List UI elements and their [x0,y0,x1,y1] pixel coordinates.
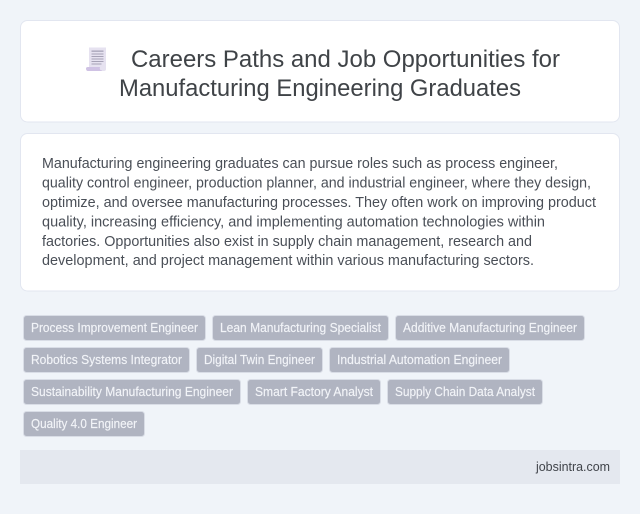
footer source text: jobsintra.com [535,460,610,474]
tag: Digital Twin Engineer [196,348,322,372]
description text: factories. Opportunities also exist in supply chain management, research and [42,234,532,250]
tag: Sustainability Manufacturing Engineer: Sustainability Manufacturing Engineer [31,385,233,399]
tag: Lean Manufacturing Specialist [212,316,388,340]
tag: Robotics Systems Integrator [24,348,190,372]
description text: quality, increasing efficiency, and implementing automation technologies within [42,214,545,230]
panel: description card [20,134,620,291]
tag: Supply Chain Data Analyst: Supply Chain Data Analyst [395,385,535,399]
tag: Sustainability Manufacturing Engineer [24,380,240,404]
tag: Process Improvement Engineer: Process Improvement Engineer [31,321,198,335]
panel: title card [20,20,620,122]
title [119,46,560,102]
title: Manufacturing Engineering Graduates [119,75,521,102]
tag: Quality 4.0 Engineer: Quality 4.0 Engineer [31,417,137,431]
tag: Smart Factory Analyst: Smart Factory Analyst [255,385,374,399]
description text [42,156,596,269]
tag: Supply Chain Data Analyst [388,380,542,404]
description text: development, and project management within various manufacturing sectors. [42,253,534,269]
tag: Process Improvement Engineer [24,316,206,340]
tag: Additive Manufacturing Engineer [396,316,584,340]
description text: Manufacturing engineering graduates can pursue roles such as process engineer, [42,156,558,172]
description text: quality control engineer, production planner, and industrial engineer, where they design, [42,176,591,192]
tag: Industrial Automation Engineer [330,348,510,372]
tag: Industrial Automation Engineer: Industrial Automation Engineer [337,353,502,367]
job tags [24,316,584,436]
tag: Robotics Systems Integrator: Robotics Systems Integrator [31,353,182,367]
tag: Digital Twin Engineer: Digital Twin Engineer [204,353,315,367]
icon: paper scroll [86,48,106,71]
tag: Additive Manufacturing Engineer: Additive Manufacturing Engineer [403,321,577,335]
tag: Quality 4.0 Engineer [24,412,144,436]
tag: Smart Factory Analyst [248,380,380,404]
title: Careers Paths and Job Opportunities for [131,46,560,73]
footer bar [20,450,620,484]
tag: Lean Manufacturing Specialist: Lean Manufacturing Specialist [220,321,382,335]
description text: optimize, and oversee manufacturing processes. They often work on improving product [42,195,596,211]
